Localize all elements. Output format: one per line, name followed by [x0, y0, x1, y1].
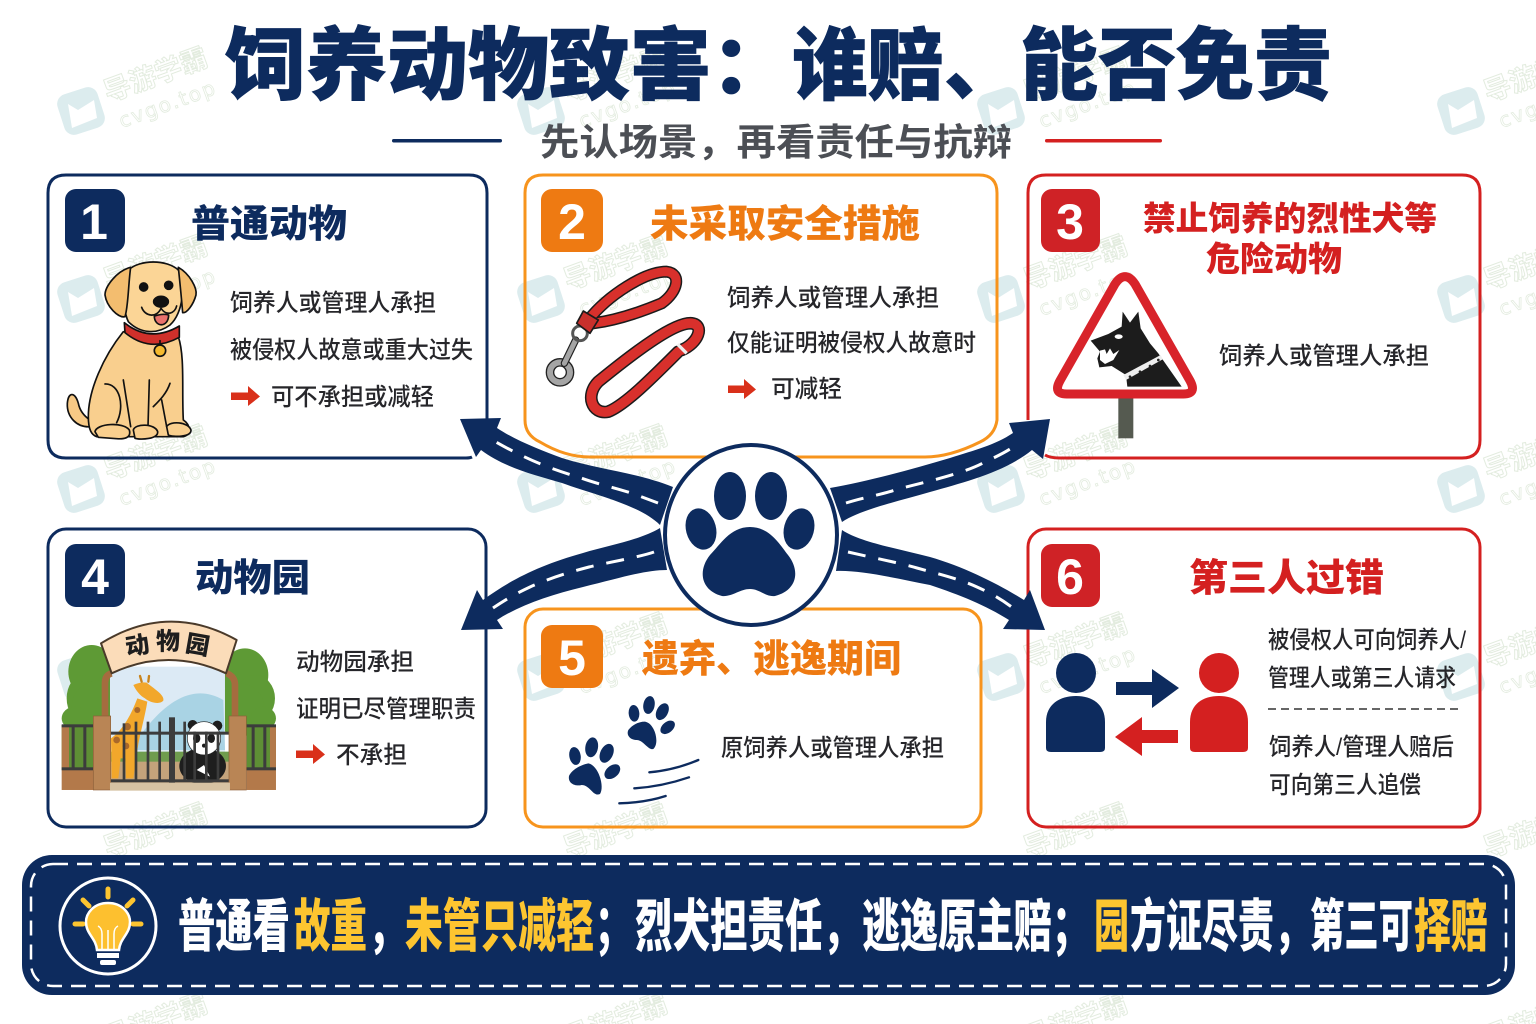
badge 3: [1041, 189, 1100, 252]
centre paw badge: [665, 445, 837, 625]
infographic canvas: 导游学霸: [560, 609, 672, 674]
infographic canvas: cvgo.top: [116, 75, 220, 133]
subtitle: 先认场景，再看责任与抗辩: [540, 122, 1012, 163]
summary text: 未管只减轻: [405, 895, 594, 959]
text block 4: 证明已尽管理职责: [296, 696, 476, 723]
icon: two people with arrows: [1046, 653, 1248, 756]
infographic canvas: 导游学霸: [1020, 231, 1132, 296]
text block 1: [230, 290, 473, 411]
badge 1: [65, 189, 125, 252]
text block 2: [727, 285, 976, 403]
infographic canvas: 导游学霸: [560, 231, 672, 296]
badge 4: [65, 544, 125, 607]
infographic canvas: cvgo.top: [1036, 75, 1140, 133]
panel 6: third party fault: [1028, 529, 1480, 827]
icon: zoo gate: 园: [183, 630, 212, 661]
title: [225, 21, 1332, 110]
text block 2: 仅能证明被侵权人故意时: [727, 330, 976, 357]
panel 3: banned dangerous animals: [1028, 175, 1480, 458]
summary text: 择赔: [1414, 895, 1488, 959]
infographic canvas: cvgo.top: [1036, 641, 1140, 699]
title: 能否免责: [1020, 21, 1332, 110]
panel 5: abandoned or escaped: [525, 609, 981, 827]
arrows: roads from centre to corners: [460, 418, 1050, 630]
text block 4: [296, 649, 476, 769]
text block 1: 可不承担或减轻: [271, 384, 434, 411]
infographic canvas: 导游学霸: [1020, 609, 1132, 674]
infographic canvas: 导游学霸: [560, 43, 672, 108]
panel 4: zoo: [48, 529, 486, 827]
badge 2: [541, 189, 603, 252]
infographic canvas: cvgo.top: [116, 263, 220, 321]
infographic canvas: 导游学霸: [100, 421, 212, 486]
summary text: [178, 895, 1488, 959]
summary text: ，: [368, 895, 405, 959]
text block 6: 可向第三人追偿: [1269, 772, 1421, 799]
heading 2: 未采取安全措施: [650, 204, 920, 246]
text block 4: 动物园承担: [296, 649, 414, 676]
heading 1: 普通动物: [191, 204, 347, 246]
heading 3: [1143, 200, 1437, 279]
icon: running paws: [568, 695, 698, 803]
panel 1: ordinary animals: [48, 175, 487, 458]
badge 6: [1041, 544, 1100, 607]
badge 3: 3: [1056, 194, 1084, 250]
heading 3: 禁止饲养的烈性犬等: [1143, 200, 1437, 237]
text block 6: 被侵权人可向饲养人/: [1268, 627, 1466, 654]
icon: light bulb: [60, 878, 156, 974]
icon: zoo gate: 物: [156, 628, 180, 655]
heading 5: 遗弃、逃逸期间: [641, 638, 901, 681]
icon: dog: [67, 262, 196, 439]
badge 1: 1: [80, 194, 108, 250]
infographic canvas: 导游学霸: [1020, 43, 1132, 108]
infographic canvas: 导游学霸: [1020, 799, 1132, 864]
heading 3: 危险动物: [1206, 240, 1342, 279]
text block 6: 管理人或第三人请求: [1268, 665, 1456, 692]
text block 1: 被侵权人故意或重大过失: [230, 337, 473, 364]
icon: zoo gate: [62, 622, 276, 791]
heading 4: 动物园: [195, 558, 310, 600]
badge 5: [541, 625, 603, 688]
badge 6: 6: [1056, 549, 1084, 605]
summary text: 普通看: [178, 895, 290, 959]
title: 谁赔、: [792, 21, 1020, 110]
infographic canvas: 导游学霸: [100, 799, 212, 864]
summary text: 园: [1094, 895, 1129, 959]
badge 4: 4: [81, 549, 109, 605]
title: 饲养动物致害：: [225, 21, 792, 110]
subtitle: [392, 122, 1162, 163]
infographic canvas: cvgo.top: [116, 453, 220, 511]
summary text: 方证尽责，: [1130, 895, 1310, 959]
summary text: 故重: [294, 895, 367, 959]
summary text: 烈犬担责任，: [635, 895, 860, 959]
summary text: ；: [595, 895, 632, 959]
text block 6: 饲养人/管理人赔后: [1269, 734, 1454, 761]
panel 2: no safety measures: [525, 175, 997, 457]
infographic canvas: 导游学霸: [560, 799, 672, 864]
infographic canvas: 导游学霸: [560, 421, 672, 486]
bottom summary banner: [22, 855, 1515, 995]
infographic canvas: 导游学霸: [1020, 421, 1132, 486]
badge 2: 2: [558, 194, 586, 250]
infographic canvas: cvgo.top: [576, 453, 680, 511]
text block 6: [1268, 627, 1466, 799]
infographic canvas: cvgo.top: [1036, 453, 1140, 511]
text block 2: 可减轻: [771, 376, 842, 403]
icon: dog warning sign: [1057, 277, 1193, 438]
text block 2: 饲养人或管理人承担: [727, 285, 939, 312]
heading 6: 第三人过错: [1189, 558, 1384, 600]
infographic canvas: cvgo.top: [576, 263, 680, 321]
infographic canvas: 导游学霸: [100, 43, 212, 108]
text block 3: 饲养人或管理人承担: [1219, 343, 1429, 370]
infographic canvas: cvgo.top: [576, 641, 680, 699]
badge 5: 5: [558, 630, 586, 686]
text block 5: 原饲养人或管理人承担: [721, 735, 944, 762]
summary text: 逃逸原主赔；: [862, 895, 1090, 959]
icon: zoo gate: 动: [123, 631, 152, 662]
infographic canvas: cvgo.top: [1036, 263, 1140, 321]
summary text: 第三可: [1310, 895, 1413, 959]
icon: leash: [550, 272, 699, 412]
text block 4: 不承担: [336, 742, 407, 769]
infographic canvas: 导游学霸: [100, 231, 212, 296]
text block 1: 饲养人或管理人承担: [230, 290, 436, 317]
infographic canvas: cvgo.top: [576, 75, 680, 133]
